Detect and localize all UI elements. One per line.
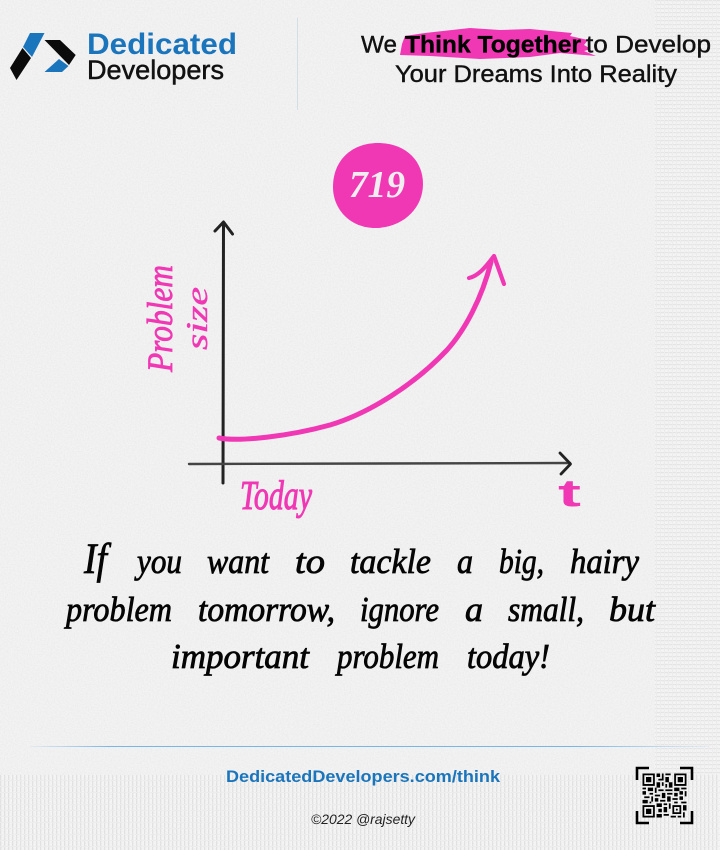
x label: t: t bbox=[558, 473, 582, 515]
quote line 3: important bbox=[171, 637, 310, 676]
logo word: Dedicated: Dedicated bbox=[87, 28, 237, 61]
quote line 3: today! bbox=[467, 637, 550, 676]
y axis label: Problem: Problem bbox=[140, 265, 180, 373]
line chart bbox=[140, 222, 582, 518]
logo word: Developers: Developers bbox=[87, 55, 224, 85]
quote line 1: If bbox=[83, 536, 111, 583]
quote line 1: tackle bbox=[350, 542, 431, 581]
quote line 1: you bbox=[134, 542, 182, 581]
quote line 2: but bbox=[609, 590, 656, 629]
badge number: 719 bbox=[349, 164, 405, 206]
QR corner brackets bbox=[637, 768, 692, 823]
footer link: DedicatedDevelopers.com/think bbox=[226, 767, 501, 786]
quote bbox=[63, 536, 656, 676]
quote line 2: tomorrow, bbox=[198, 590, 335, 629]
tagline line 1: to Develop bbox=[586, 32, 711, 58]
tagline line 1: Think Together bbox=[405, 32, 581, 58]
tagline bbox=[361, 28, 711, 88]
quote line 1: hairy bbox=[570, 542, 639, 581]
brush highlight bbox=[400, 28, 596, 59]
x label: Today: Today bbox=[240, 472, 313, 518]
x axis bbox=[189, 453, 570, 474]
quote line 1: to bbox=[295, 542, 325, 581]
quote line 1 bbox=[83, 536, 639, 583]
quote line 1: big, bbox=[499, 542, 544, 581]
y axis bbox=[215, 222, 232, 483]
quote line 1: a bbox=[457, 542, 473, 581]
tagline line 2: Your Dreams Into Reality bbox=[395, 61, 677, 88]
number badge bbox=[333, 143, 423, 228]
footer rule bbox=[30, 746, 710, 747]
quote line 3: problem bbox=[334, 637, 439, 676]
quote line 2: problem bbox=[63, 590, 172, 629]
y axis label: size: size bbox=[179, 287, 214, 350]
growth curve bbox=[219, 262, 491, 439]
quote line 2: small, bbox=[508, 590, 584, 629]
badge blob bbox=[333, 143, 423, 228]
tagline line 1: We bbox=[361, 32, 397, 58]
quote line 2: ignore bbox=[360, 590, 439, 629]
quote line 3 bbox=[171, 637, 550, 676]
quote line 1: want bbox=[207, 542, 270, 581]
icon: QR code bbox=[637, 768, 692, 823]
logo: Dedicated Developers bbox=[10, 28, 237, 85]
copyright: ©2022 @rajsetty bbox=[311, 811, 416, 827]
header divider bbox=[297, 18, 298, 110]
quote line 2: a bbox=[465, 590, 483, 629]
QR modules bbox=[642, 774, 686, 818]
tagline line 1 bbox=[361, 32, 711, 58]
curve arrowhead bbox=[469, 256, 504, 284]
icon: logo mark bbox=[10, 33, 76, 80]
quote line 2 bbox=[63, 590, 656, 629]
